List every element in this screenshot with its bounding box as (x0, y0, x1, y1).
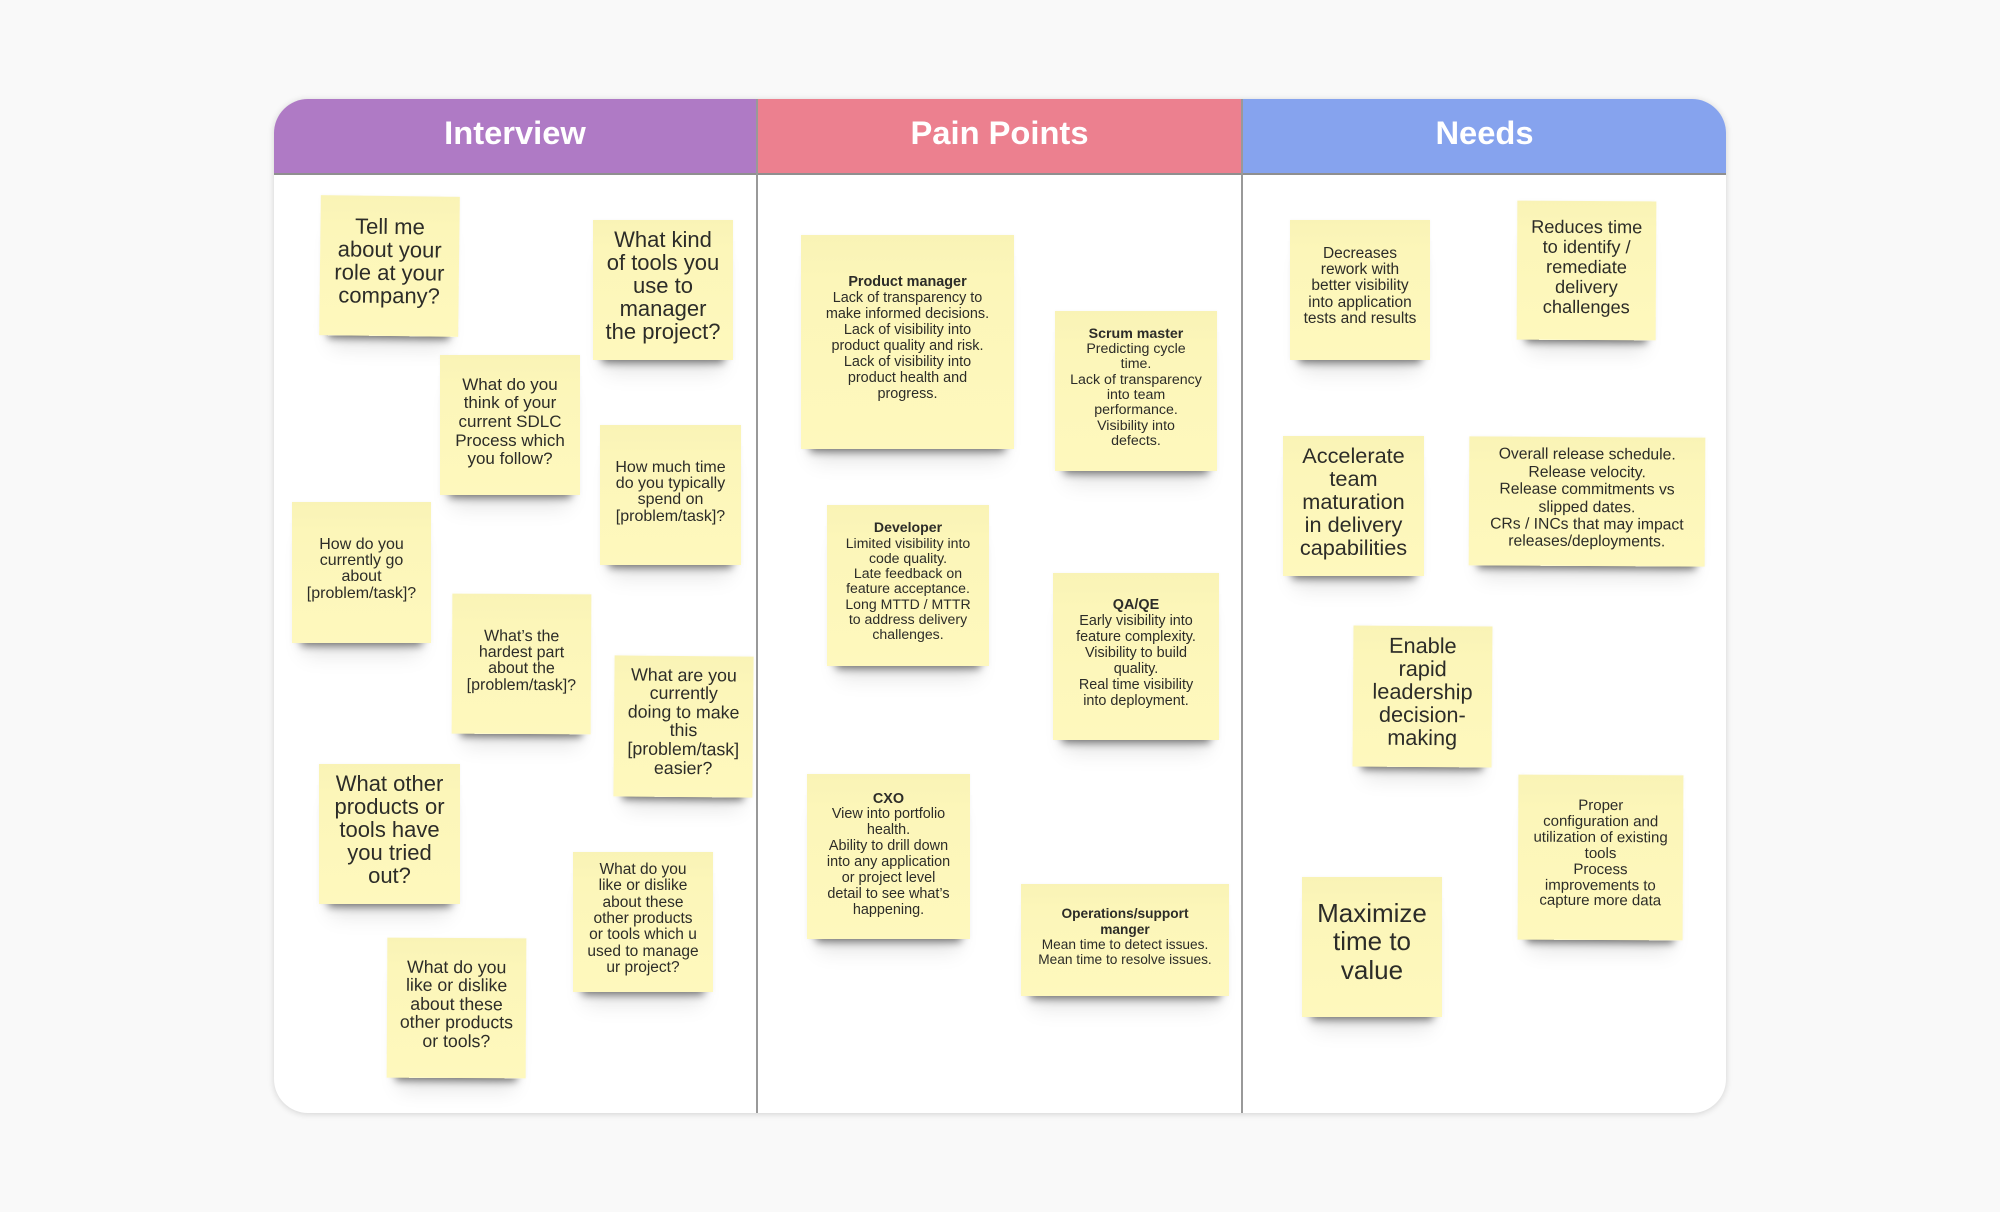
note: like or dislike question: other products (400, 1012, 513, 1033)
note: CXO: health. (867, 822, 910, 838)
note: rapid leadership decisions: rapid (1398, 655, 1447, 681)
note: other products question: tools have (339, 816, 440, 842)
note: configuration and process: Process (1573, 860, 1628, 878)
note: current approach question: about (341, 568, 382, 585)
note: Developer: Developer (874, 519, 942, 535)
note: accelerate team maturation: in delivery (1305, 512, 1402, 536)
note: Scrum master: Visibility into (1097, 418, 1175, 434)
note: Product manager: Lack of visibility into (844, 354, 971, 370)
note: QA/QE: QA/QE (1113, 597, 1159, 613)
note: Operations/support manger: Operations/support (1062, 906, 1188, 921)
note: hardest part question: [problem/task]? (467, 676, 576, 694)
note: release schedule: Release velocity. (1528, 463, 1646, 481)
note: hardest part question: about the (488, 660, 555, 678)
note: CXO: View into portfolio (832, 806, 945, 822)
note: configuration and process: utilization of existing (1533, 828, 1668, 846)
note: Operations/support manger: manger (1100, 922, 1150, 937)
note: configuration and process (1518, 775, 1683, 940)
note: decreases rework: into application (1308, 294, 1412, 311)
note: rapid leadership decisions (1353, 626, 1492, 767)
note: like or dislike, used to manage: other products (593, 910, 693, 927)
note: reduces time: challenges (1543, 296, 1630, 317)
note: CXO: detail to see what’s (827, 886, 950, 902)
note: other products question: out? (368, 862, 411, 888)
note: Product manager: make informed decisions. (826, 306, 989, 322)
note: like or dislike, used to manage: used to manage (587, 943, 699, 960)
note: like or dislike question: like or dislike (406, 975, 507, 996)
note: maximize time to value: Maximize (1317, 898, 1427, 928)
note: Developer: Long MTTD / MTTR (845, 596, 971, 612)
note: SDLC process question: current SDLC (458, 412, 561, 431)
note: other products question: you tried (347, 840, 432, 864)
note: accelerate team maturation: team (1329, 466, 1378, 490)
note: SDLC process question (440, 355, 580, 495)
note: role question: company? (338, 282, 440, 309)
note: configuration and process: improvements to (1545, 876, 1656, 894)
note: making it easier question: [problem/task] (627, 739, 739, 760)
note: accelerate team maturation (1283, 436, 1424, 576)
note: reduces time: Reduces time (1531, 216, 1642, 237)
note: Developer: Limited visibility into (846, 535, 970, 551)
note: Scrum master (1055, 311, 1217, 471)
note: CXO: or project level (842, 870, 935, 886)
note: current approach question: [problem/task]? (307, 585, 416, 602)
note: QA/QE: Visibility to build (1085, 645, 1187, 661)
note: Operations/support manger: Mean time to resolve issues. (1038, 952, 1212, 967)
note: role question: role at your (334, 259, 445, 286)
panel: Pain Points (758, 99, 1243, 1113)
note: other products question: What other (336, 770, 443, 796)
note: configuration and process: Proper (1578, 797, 1623, 814)
note: reduces time: remediate (1546, 256, 1627, 277)
note: accelerate team maturation: Accelerate (1302, 442, 1405, 468)
note: time spent question: [problem/task]? (616, 508, 725, 525)
note: time spent question: How much time (615, 459, 726, 476)
note: SDLC process question: you follow? (467, 449, 553, 468)
note: configuration and process: configuration and (1543, 813, 1658, 830)
heading: Pain Points: Pain Points (910, 114, 1088, 151)
note: other products question (319, 764, 460, 904)
note: time spent question: do you typically (616, 475, 725, 492)
note: CXO: into any application (827, 854, 950, 870)
note: hardest part question: What’s the (484, 628, 559, 645)
note: like or dislike question: What do you (407, 956, 506, 977)
note: like or dislike, used to manage: What do you (599, 861, 687, 878)
note: time spent question (600, 425, 741, 565)
note: Product manager: Lack of visibility into (844, 322, 971, 338)
note: CXO: Ability to drill down (829, 838, 948, 854)
note: current approach question: How do you (319, 536, 404, 553)
note: Product manager: Product manager (848, 274, 967, 290)
note: release schedule: CRs / INCs that may impact (1490, 515, 1684, 533)
note: Product manager: progress. (878, 386, 938, 402)
note: like or dislike, used to manage: ur project? (606, 959, 680, 976)
note: tools question: use to (633, 272, 693, 298)
note: other products question: products or (334, 794, 445, 818)
note: QA/QE: feature complexity. (1076, 629, 1196, 645)
note: CXO: happening. (853, 902, 924, 918)
note: Product manager: Lack of transparency to (833, 290, 982, 306)
note: maximize time to value: time to (1333, 926, 1411, 956)
note: reduces time: delivery (1555, 277, 1618, 297)
note: Scrum master: defects. (1111, 433, 1161, 449)
note: Developer: feature acceptance. (846, 580, 970, 596)
note: decreases rework: rework with (1321, 261, 1399, 278)
note: like or dislike, used to manage (573, 852, 713, 992)
note: SDLC process question: think of your (464, 393, 556, 412)
note: accelerate team maturation: capabilities (1300, 534, 1407, 560)
note: maximize time to value: value (1341, 955, 1403, 985)
note: like or dislike question: or tools? (422, 1031, 490, 1051)
note: rapid leadership decisions: leadership (1372, 678, 1473, 704)
note: QA/QE (1053, 573, 1219, 740)
note: Product manager (801, 235, 1014, 449)
note: Developer: Late feedback on (854, 565, 962, 581)
note: QA/QE: Early visibility into (1079, 613, 1193, 629)
heading: Interview (274, 99, 756, 175)
panel: Interview (274, 99, 758, 1113)
heading: Needs (1243, 99, 1726, 175)
note: release schedule: Release commitments vs (1499, 481, 1675, 499)
note: Product manager: product quality and risk. (832, 338, 983, 354)
note: Developer: challenges. (872, 626, 944, 642)
note: decreases rework: tests and results (1304, 310, 1416, 327)
note: Developer: code quality. (869, 550, 947, 566)
note: hardest part question: hardest part (479, 644, 564, 661)
note: CXO: CXO (873, 790, 904, 806)
note: SDLC process question: What do you (462, 375, 558, 394)
note: Developer (827, 505, 989, 666)
note: role question (319, 195, 460, 337)
note: Scrum master: Lack of transparency (1070, 372, 1202, 388)
note: like or dislike question: about these (410, 994, 503, 1014)
note: configuration and process: capture more data (1539, 892, 1661, 910)
note: decreases rework: Decreases (1323, 244, 1397, 262)
note: Scrum master: time. (1121, 356, 1151, 372)
note: like or dislike, used to manage: or tools which u (589, 926, 697, 943)
note: like or dislike question (387, 938, 526, 1078)
note: release schedule: Overall release schedule. (1499, 446, 1676, 464)
note: reduces time: to identify / (1543, 236, 1631, 257)
note: accelerate team maturation: maturation (1302, 488, 1405, 514)
note: role question: Tell me (355, 214, 425, 239)
note: tools question (593, 220, 733, 360)
note: like or dislike, used to manage: like or dislike (599, 877, 687, 894)
note: Operations/support manger (1021, 884, 1229, 996)
note: making it easier question: What are you (631, 664, 737, 685)
note: making it easier question: this (670, 720, 697, 741)
note: release schedule (1469, 436, 1705, 567)
note: QA/QE: quality. (1114, 661, 1158, 677)
note: current approach question (292, 502, 431, 643)
note: tools question: manager (620, 296, 706, 320)
note: tools question: the project? (606, 318, 720, 344)
note: QA/QE: Real time visibility (1079, 677, 1193, 693)
note: decreases rework (1290, 220, 1430, 360)
note: decreases rework: better visibility (1311, 277, 1409, 294)
note: current approach question: currently go (320, 552, 403, 569)
note: rapid leadership decisions: making (1387, 724, 1457, 750)
heading: Interview: Interview (444, 114, 586, 151)
note: Scrum master: into team (1107, 387, 1165, 403)
note: release schedule: releases/deployments. (1508, 533, 1665, 551)
note: release schedule: slipped dates. (1539, 498, 1635, 516)
note: tools question: of tools you (607, 250, 719, 274)
note: SDLC process question: Process which (455, 431, 565, 450)
heading: Pain Points (758, 99, 1241, 175)
note: maximize time to value (1302, 877, 1442, 1017)
note: Developer: to address delivery (849, 611, 967, 627)
note: CXO (807, 774, 970, 939)
note: making it easier question: currently (650, 683, 718, 704)
note: hardest part question (452, 594, 591, 734)
note: like or dislike, used to manage: about these (602, 894, 684, 911)
note: making it easier question (613, 655, 754, 798)
note: configuration and process: tools (1585, 845, 1616, 862)
note: making it easier question: easier? (654, 757, 712, 778)
note: making it easier question: doing to make (628, 701, 740, 722)
note: Product manager: product health and (848, 370, 967, 386)
note: Scrum master: Scrum master (1089, 326, 1183, 342)
note: rapid leadership decisions: decision- (1379, 701, 1466, 727)
note: reduces time (1517, 201, 1656, 340)
note: rapid leadership decisions: Enable (1389, 632, 1457, 658)
note: tools question: What kind (614, 226, 712, 252)
note: Scrum master: performance. (1094, 402, 1178, 418)
note: role question: about your (338, 236, 442, 263)
note: time spent question: spend on (638, 491, 703, 508)
board (274, 99, 1726, 1113)
note: QA/QE: into deployment. (1083, 693, 1189, 709)
note: Operations/support manger: Mean time to detect issues. (1042, 937, 1208, 952)
panel: Needs (1243, 99, 1726, 1034)
heading: Needs: Needs (1435, 114, 1534, 151)
note: Scrum master: Predicting cycle (1086, 341, 1186, 357)
